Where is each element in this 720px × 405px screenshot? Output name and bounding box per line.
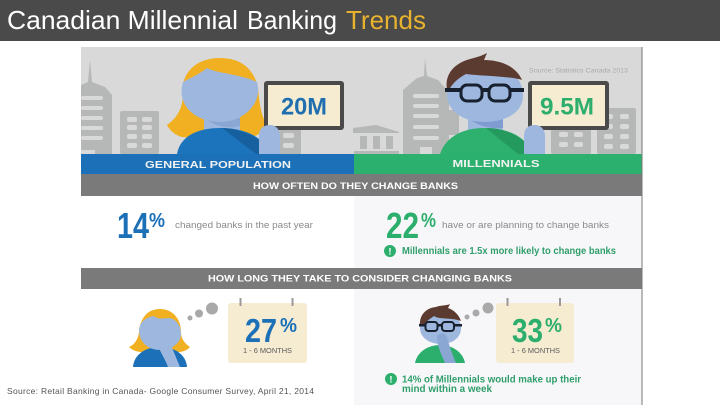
band: general population: GENERAL POPULATION: [145, 160, 291, 171]
calendar: general population 27%: 1 - 6 MONTHS: [243, 346, 292, 355]
title: [7, 5, 426, 35]
icon: thinking man with glasses: [415, 304, 465, 363]
calendar: millennials 33%: 1 - 6 MONTHS: [511, 346, 560, 355]
icon: thought bubbles left: [188, 302, 218, 320]
callout: 1.5x more likely: !: [388, 246, 392, 258]
calendar: general population 27%: [228, 298, 307, 363]
stat: general population 14%: %: [149, 210, 165, 232]
title: Trends: [346, 5, 426, 35]
stat: millennials 22%: 22: [386, 205, 419, 246]
calendar: millennials 33%: %: [545, 315, 562, 337]
panel: right column background: [354, 196, 642, 405]
band: millennials: MILLENNIALS: [452, 159, 540, 170]
icon: woman with screen: 20M: [281, 94, 327, 120]
stat: general population 14%: [117, 205, 313, 246]
stat: millennials 22%: have or are planning to change banks: [442, 220, 610, 230]
calendar: general population 27%: 27: [245, 312, 277, 349]
band: general population: [81, 154, 354, 174]
calendar: millennials 33%: [496, 298, 574, 363]
callout: 14% decide within a week: [385, 373, 581, 395]
icon: woman with screen: [167, 58, 342, 154]
band: millennials: [354, 154, 642, 174]
panel: city header: [81, 47, 642, 154]
callout: 14% decide within a week: 14% of Millennials would make up their: [402, 374, 581, 386]
title bar: [0, 0, 720, 41]
heading: how long: HOW LONG THEY TAKE TO CONSIDER CHANGING BANKS: [208, 274, 512, 284]
title: Banking: [247, 5, 337, 35]
stat: general population 14%: 14: [117, 205, 149, 246]
callout: 1.5x more likely: Millennials are 1.5x more likely to change banks: [402, 245, 616, 257]
source citation: Source: Retail Banking in Canada- Google Consumer Survey, April 21, 2014: [7, 386, 314, 396]
buildings: right skyline: [353, 58, 636, 154]
buildings: left skyline: [81, 60, 301, 154]
heading: how long: [81, 268, 642, 289]
heading: how often: [81, 174, 642, 196]
icon: millennial man with glasses and screen: [440, 53, 607, 154]
calendar: general population 27%: %: [280, 315, 297, 337]
calendar: millennials 33%: 33: [512, 312, 543, 349]
icon: millennial man with glasses and screen: 9.5M: [540, 94, 594, 120]
icon: thinking woman: [129, 309, 190, 367]
callout: 14% decide within a week: !: [389, 374, 393, 386]
source note: Source: Statistics Canada 2013: [529, 68, 628, 74]
stat: millennials 22%: %: [421, 210, 436, 232]
heading: how often: HOW OFTEN DO THEY CHANGE BANKS: [253, 181, 458, 192]
title: Canadian Millennial: [7, 5, 238, 35]
callout: 14% decide within a week: mind within a week: [402, 383, 492, 395]
panel right border: [642, 47, 643, 405]
stat: general population 14%: changed banks in the past year: [175, 220, 313, 230]
icon: thought bubbles right: [464, 302, 494, 320]
stat: millennials 22%: [386, 205, 610, 246]
